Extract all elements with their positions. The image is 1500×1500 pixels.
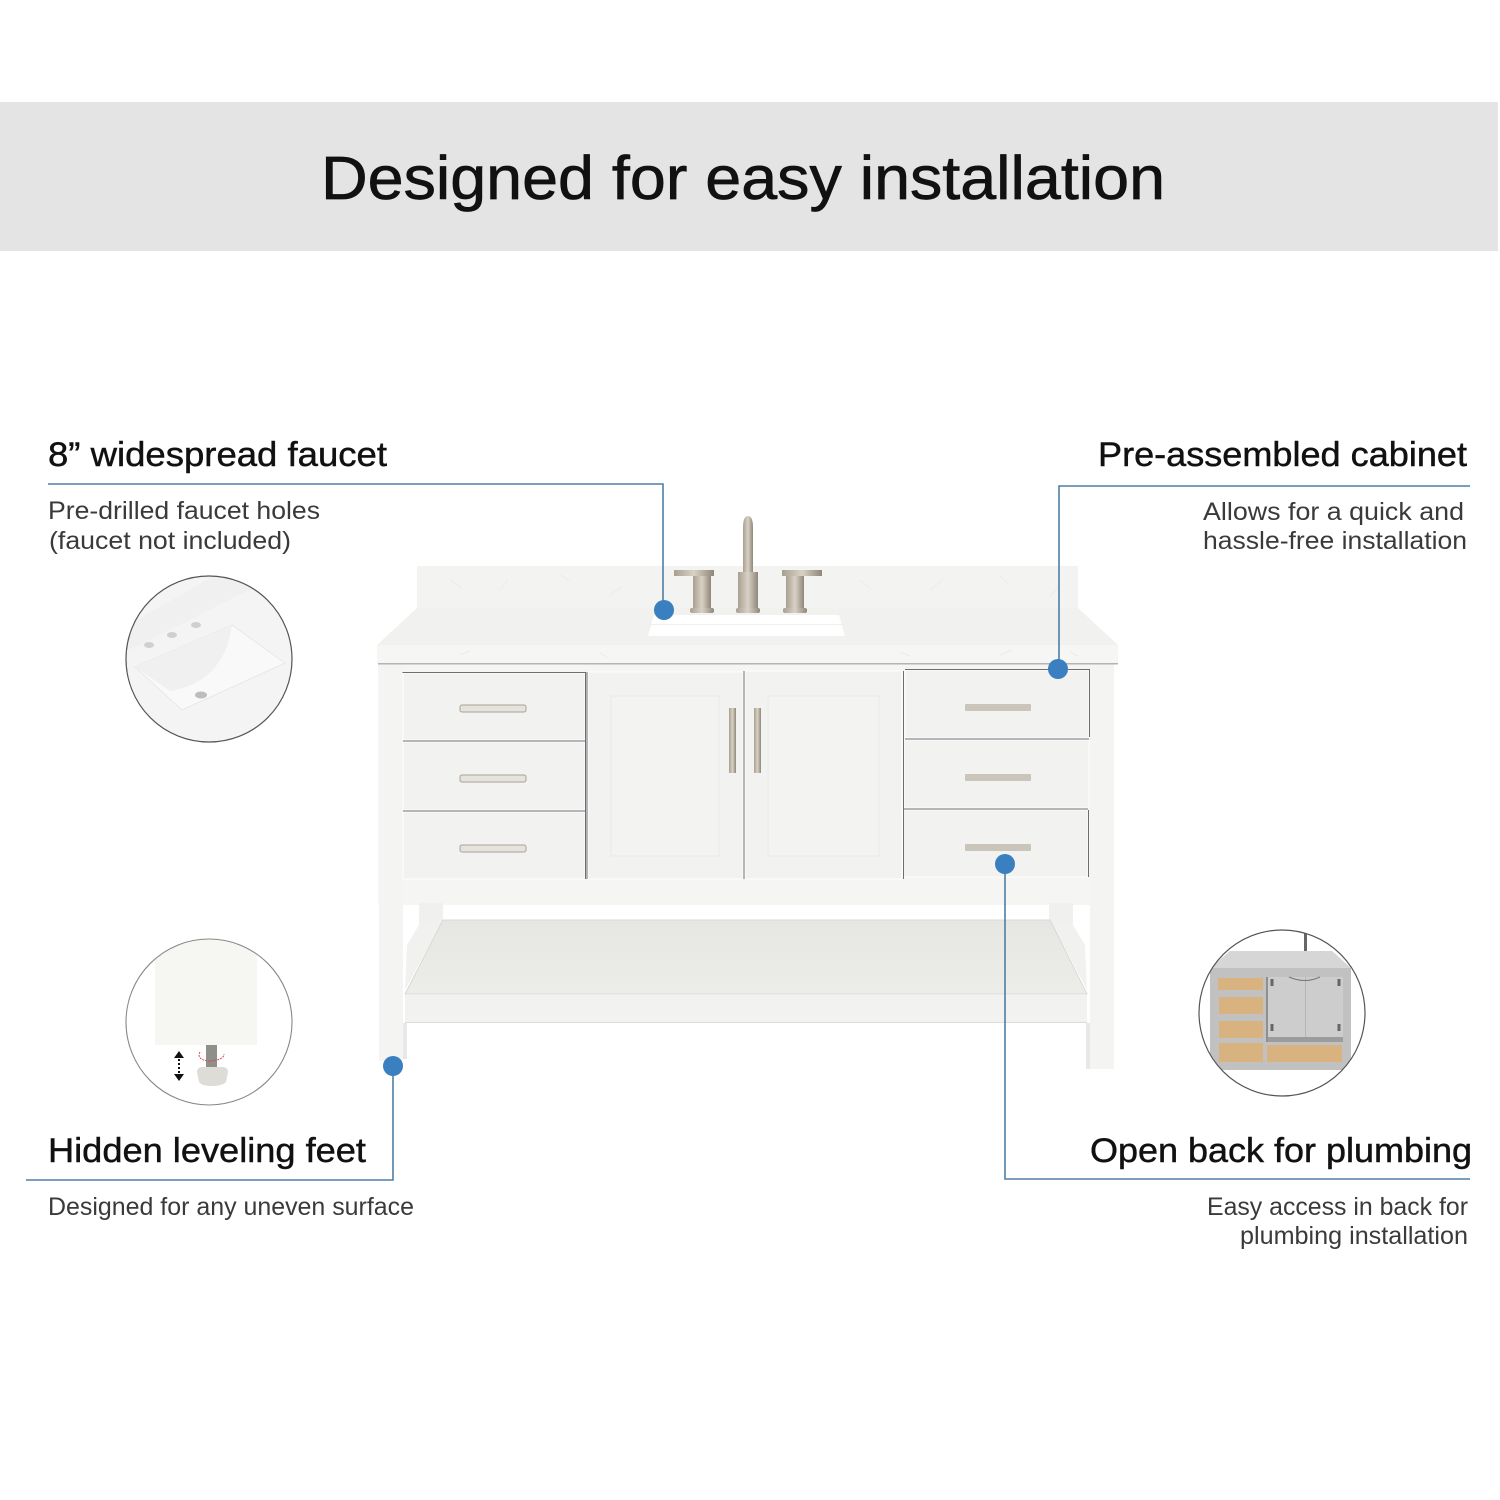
title: Designed for easy installation: [321, 144, 1165, 212]
sink basin: [135, 625, 285, 710]
leader line: [1059, 486, 1470, 668]
marble top: [1210, 951, 1351, 968]
vanity illustration: [377, 516, 1118, 1069]
height arrows: [174, 1051, 184, 1081]
hinges: [1272, 979, 1339, 1031]
lower shelf front: [405, 995, 1087, 1023]
countertop surface: [377, 608, 1118, 645]
callout: open back for plumbing: [995, 854, 1472, 1250]
description: Allows for a quick and: [1203, 498, 1464, 526]
heading: Hidden leveling feet: [48, 1132, 367, 1170]
description: hassle-free installation: [1203, 527, 1467, 555]
threaded stem: [206, 1045, 217, 1069]
cabinet body: [378, 663, 1114, 905]
door handles: [729, 708, 761, 773]
marker dot: [995, 854, 1015, 874]
description: [48, 497, 320, 555]
foot pad: [197, 1067, 228, 1086]
callout: hidden leveling feet: [26, 1056, 414, 1221]
front counter light: [240, 695, 300, 740]
header band: [0, 102, 1498, 251]
callout: 8 inch widespread faucet: [48, 436, 674, 620]
lower shelf top: [405, 920, 1087, 994]
left drawers: [403, 673, 585, 879]
heading: 8” widespread faucet: [48, 436, 388, 474]
stone veining: [450, 575, 1078, 658]
pipe: [1304, 934, 1307, 951]
marker dot: [1048, 659, 1068, 679]
description: Pre-drilled faucet holes: [48, 497, 320, 525]
undermount sink: [648, 615, 845, 636]
panel gap shadow lines: [402, 670, 1090, 879]
drawer boxes: [1218, 978, 1342, 1062]
door backs: [1268, 977, 1343, 1037]
description: plumbing installation: [1240, 1222, 1468, 1250]
leg block: [155, 930, 257, 1045]
rotation arrow: [199, 1052, 224, 1061]
leader line: [26, 1066, 393, 1180]
drain: [195, 692, 207, 698]
inset: sink detail: [120, 575, 300, 742]
inset: open back detail: [1199, 930, 1365, 1096]
right drawer handles: [965, 704, 1031, 851]
heading: Pre-assembled cabinet: [1098, 436, 1468, 474]
description: [1207, 1193, 1468, 1250]
backsplash: [417, 566, 1078, 609]
cabinet doors: [588, 671, 902, 879]
inset: leveling foot detail: [126, 930, 292, 1105]
back legs: [419, 903, 443, 925]
backsplash edge: [120, 575, 300, 650]
heading: Open back for plumbing: [1090, 1132, 1472, 1170]
description: [1203, 498, 1467, 555]
door inset panels: [611, 696, 879, 856]
faucet holes: [144, 642, 154, 648]
description: (faucet not included): [49, 527, 291, 555]
right front leg: [1090, 665, 1114, 1069]
faucet: [674, 516, 822, 613]
countertop front edge: [377, 645, 1118, 663]
callout: pre-assembled cabinet: [1048, 436, 1470, 679]
right drawers: [903, 670, 1089, 877]
marker dot: [654, 600, 674, 620]
leader line: [1005, 864, 1470, 1179]
drawer handles: [460, 705, 526, 852]
handle: [1289, 977, 1320, 980]
description: Easy access in back for: [1207, 1193, 1468, 1221]
left front leg: [379, 665, 403, 1061]
marker dot: [383, 1056, 403, 1076]
description: Designed for any uneven surface: [48, 1193, 414, 1221]
cabinet back: [1210, 968, 1351, 1070]
leader line: [48, 484, 663, 610]
